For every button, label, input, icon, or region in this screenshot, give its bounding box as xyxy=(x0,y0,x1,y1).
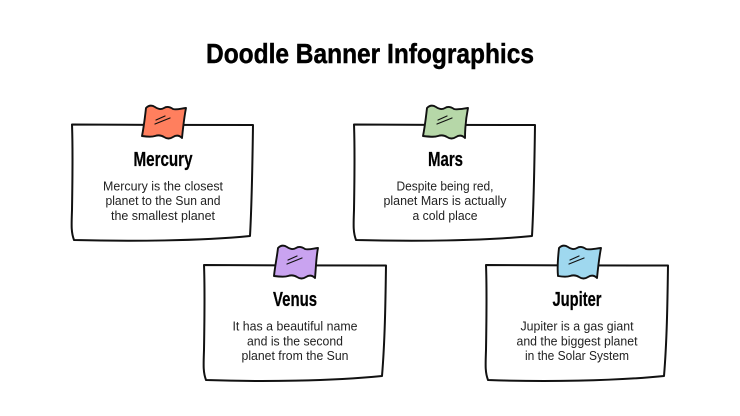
panel: Jupiter xyxy=(486,246,668,381)
description: Mercury is the closest xyxy=(103,180,224,194)
description: planet Mars is actually xyxy=(384,194,507,208)
heading: Mars xyxy=(428,149,463,171)
description: the smallest planet xyxy=(111,209,216,223)
description: and is the second xyxy=(247,334,343,348)
description: Despite being red, xyxy=(396,180,494,194)
icon: purple tape xyxy=(274,246,318,278)
description: planet from the Sun xyxy=(242,349,349,363)
icon: blue tape xyxy=(558,246,601,278)
description xyxy=(232,320,358,363)
card outline xyxy=(204,265,386,381)
panel: Venus xyxy=(204,246,386,381)
card outline xyxy=(354,124,535,241)
description: planet to the Sun and xyxy=(106,194,221,208)
description xyxy=(516,320,638,363)
description xyxy=(384,180,507,223)
icon: green tape xyxy=(423,106,468,138)
heading: Jupiter xyxy=(552,289,602,311)
panel: Mars xyxy=(354,106,535,241)
panel: Mercury xyxy=(72,106,253,241)
description: in the Solar System xyxy=(525,349,629,363)
icon: coral tape xyxy=(142,106,186,138)
heading: Mercury xyxy=(134,149,193,171)
description: and the biggest planet xyxy=(516,334,638,348)
title: Doodle Banner Infographics xyxy=(206,38,534,69)
card outline xyxy=(486,265,668,381)
description: Jupiter is a gas giant xyxy=(520,320,634,334)
heading: Venus xyxy=(273,289,317,311)
card outline xyxy=(72,124,253,241)
description xyxy=(103,180,224,223)
description: It has a beautiful name xyxy=(232,320,358,334)
description: a cold place xyxy=(412,209,478,223)
